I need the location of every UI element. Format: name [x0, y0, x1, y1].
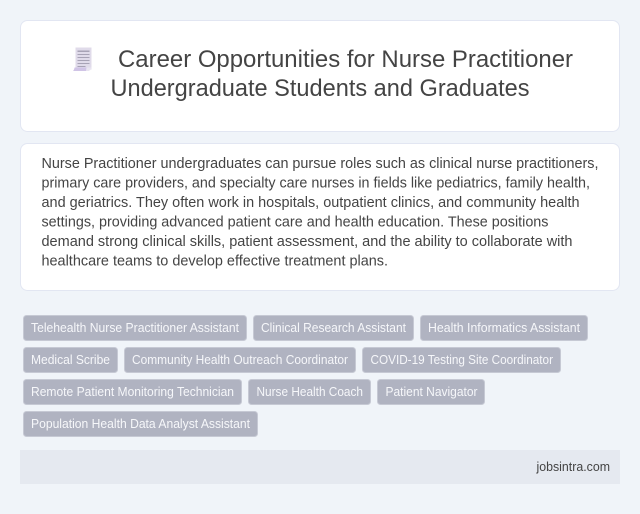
- tag: Population Health Data Analyst Assistant: [24, 412, 258, 436]
- header panel: [20, 20, 620, 132]
- tag: Remote Patient Monitoring Technician: [24, 380, 242, 404]
- tag: Medical Scribe: [24, 348, 118, 372]
- tag: Community Health Outreach Coordinator: Community Health Outreach Coordinator: [132, 352, 349, 367]
- tag: Patient Navigator: [378, 380, 484, 404]
- panel: description: [20, 144, 620, 290]
- job tags: [24, 316, 588, 436]
- footer bar: [20, 450, 620, 484]
- tag: COVID-19 Testing Site Coordinator: [362, 348, 560, 372]
- tag: COVID-19 Testing Site Coordinator: COVID-19 Testing Site Coordinator: [370, 352, 554, 367]
- tag: Medical Scribe: Medical Scribe: [31, 352, 110, 367]
- tag: Remote Patient Monitoring Technician: Remote Patient Monitoring Technician: [31, 384, 234, 399]
- description text: healthcare teams to develop effective treatment plans.: [42, 254, 388, 270]
- tag: Community Health Outreach Coordinator: [124, 348, 356, 372]
- description text: Nurse Practitioner undergraduates can pursue roles such as clinical nurse practitioners,: [42, 156, 598, 172]
- tag: Clinical Research Assistant: [254, 316, 414, 340]
- tag: Health Informatics Assistant: Health Informatics Assistant: [428, 320, 580, 335]
- footer source text: jobsintra.com: [536, 459, 610, 474]
- tag: Clinical Research Assistant: Clinical Research Assistant: [261, 320, 406, 335]
- icon: document scroll: [73, 48, 92, 71]
- tag: Nurse Health Coach: Nurse Health Coach: [256, 384, 363, 399]
- tag: Patient Navigator: Patient Navigator: [386, 384, 478, 399]
- tag: Population Health Data Analyst Assistant: Population Health Data Analyst Assistant: [31, 416, 250, 431]
- description text: [42, 156, 598, 270]
- tag: Nurse Health Coach: [248, 380, 370, 404]
- title: Career Opportunities for Nurse Practitioner: [118, 46, 573, 73]
- title: [110, 46, 573, 102]
- description text: demand strong clinical skills, patient assessment, and the ability to collaborate with: [42, 234, 572, 250]
- tag: Health Informatics Assistant: [420, 316, 588, 340]
- description text: settings, providing advanced patient care and health education. These positions: [42, 214, 548, 230]
- tag: Telehealth Nurse Practitioner Assistant: [24, 316, 246, 340]
- title: Undergraduate Students and Graduates: [110, 75, 530, 102]
- tag: Telehealth Nurse Practitioner Assistant: Telehealth Nurse Practitioner Assistant: [31, 320, 239, 335]
- description text: primary care providers, and specialty care nurses in fields like pediatrics, family health,: [42, 176, 590, 192]
- description text: and geriatrics. They often work in hospitals, outpatient clinics, and community health: [42, 195, 580, 211]
